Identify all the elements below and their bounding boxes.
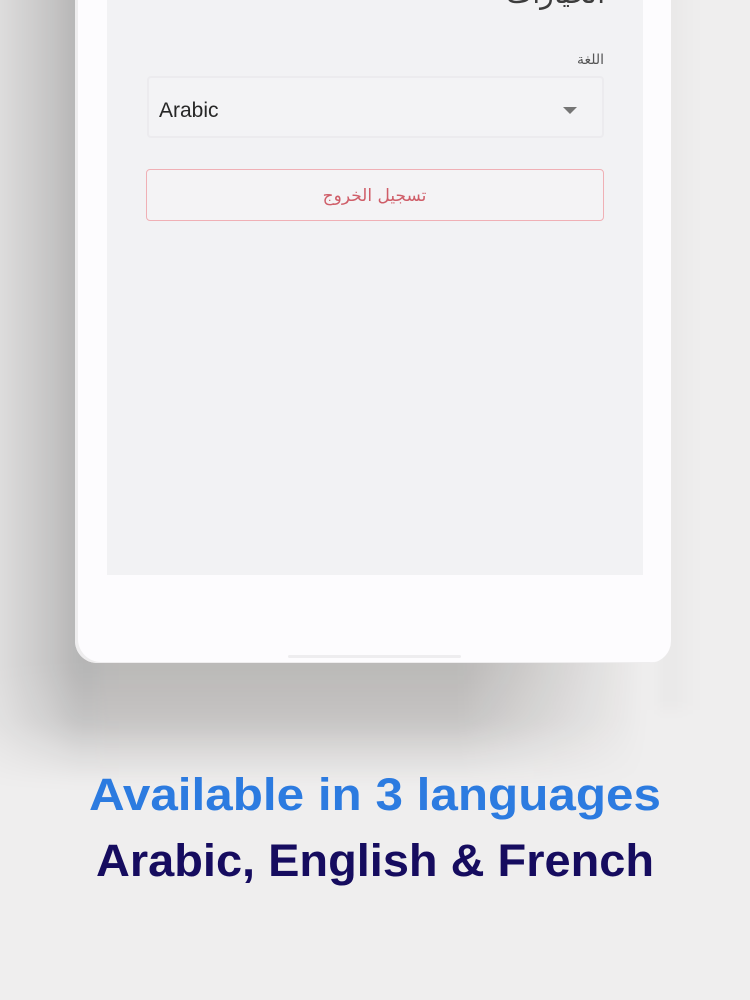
- left shadow band: [0, 0, 100, 790]
- home indicator: [288, 655, 461, 658]
- caption text: [89, 769, 661, 886]
- app screen: [107, 0, 643, 575]
- right shadow band: [660, 0, 700, 710]
- background shadow cast by tablet: [0, 0, 619, 772]
- subheadline: language list: Arabic, English & French: [96, 835, 654, 886]
- language dropdown: [147, 76, 604, 138]
- logout label: تسجيل الخروج: [323, 186, 426, 206]
- dropdown arrow icon: [563, 107, 577, 114]
- language label: اللغة: [577, 52, 604, 68]
- dropdown value: Arabic: [159, 99, 219, 122]
- bottom shadow band: [93, 663, 619, 772]
- headline: available languages: Available in 3 languages: [89, 769, 661, 820]
- tablet device: [75, 0, 671, 663]
- logout button: [146, 169, 604, 221]
